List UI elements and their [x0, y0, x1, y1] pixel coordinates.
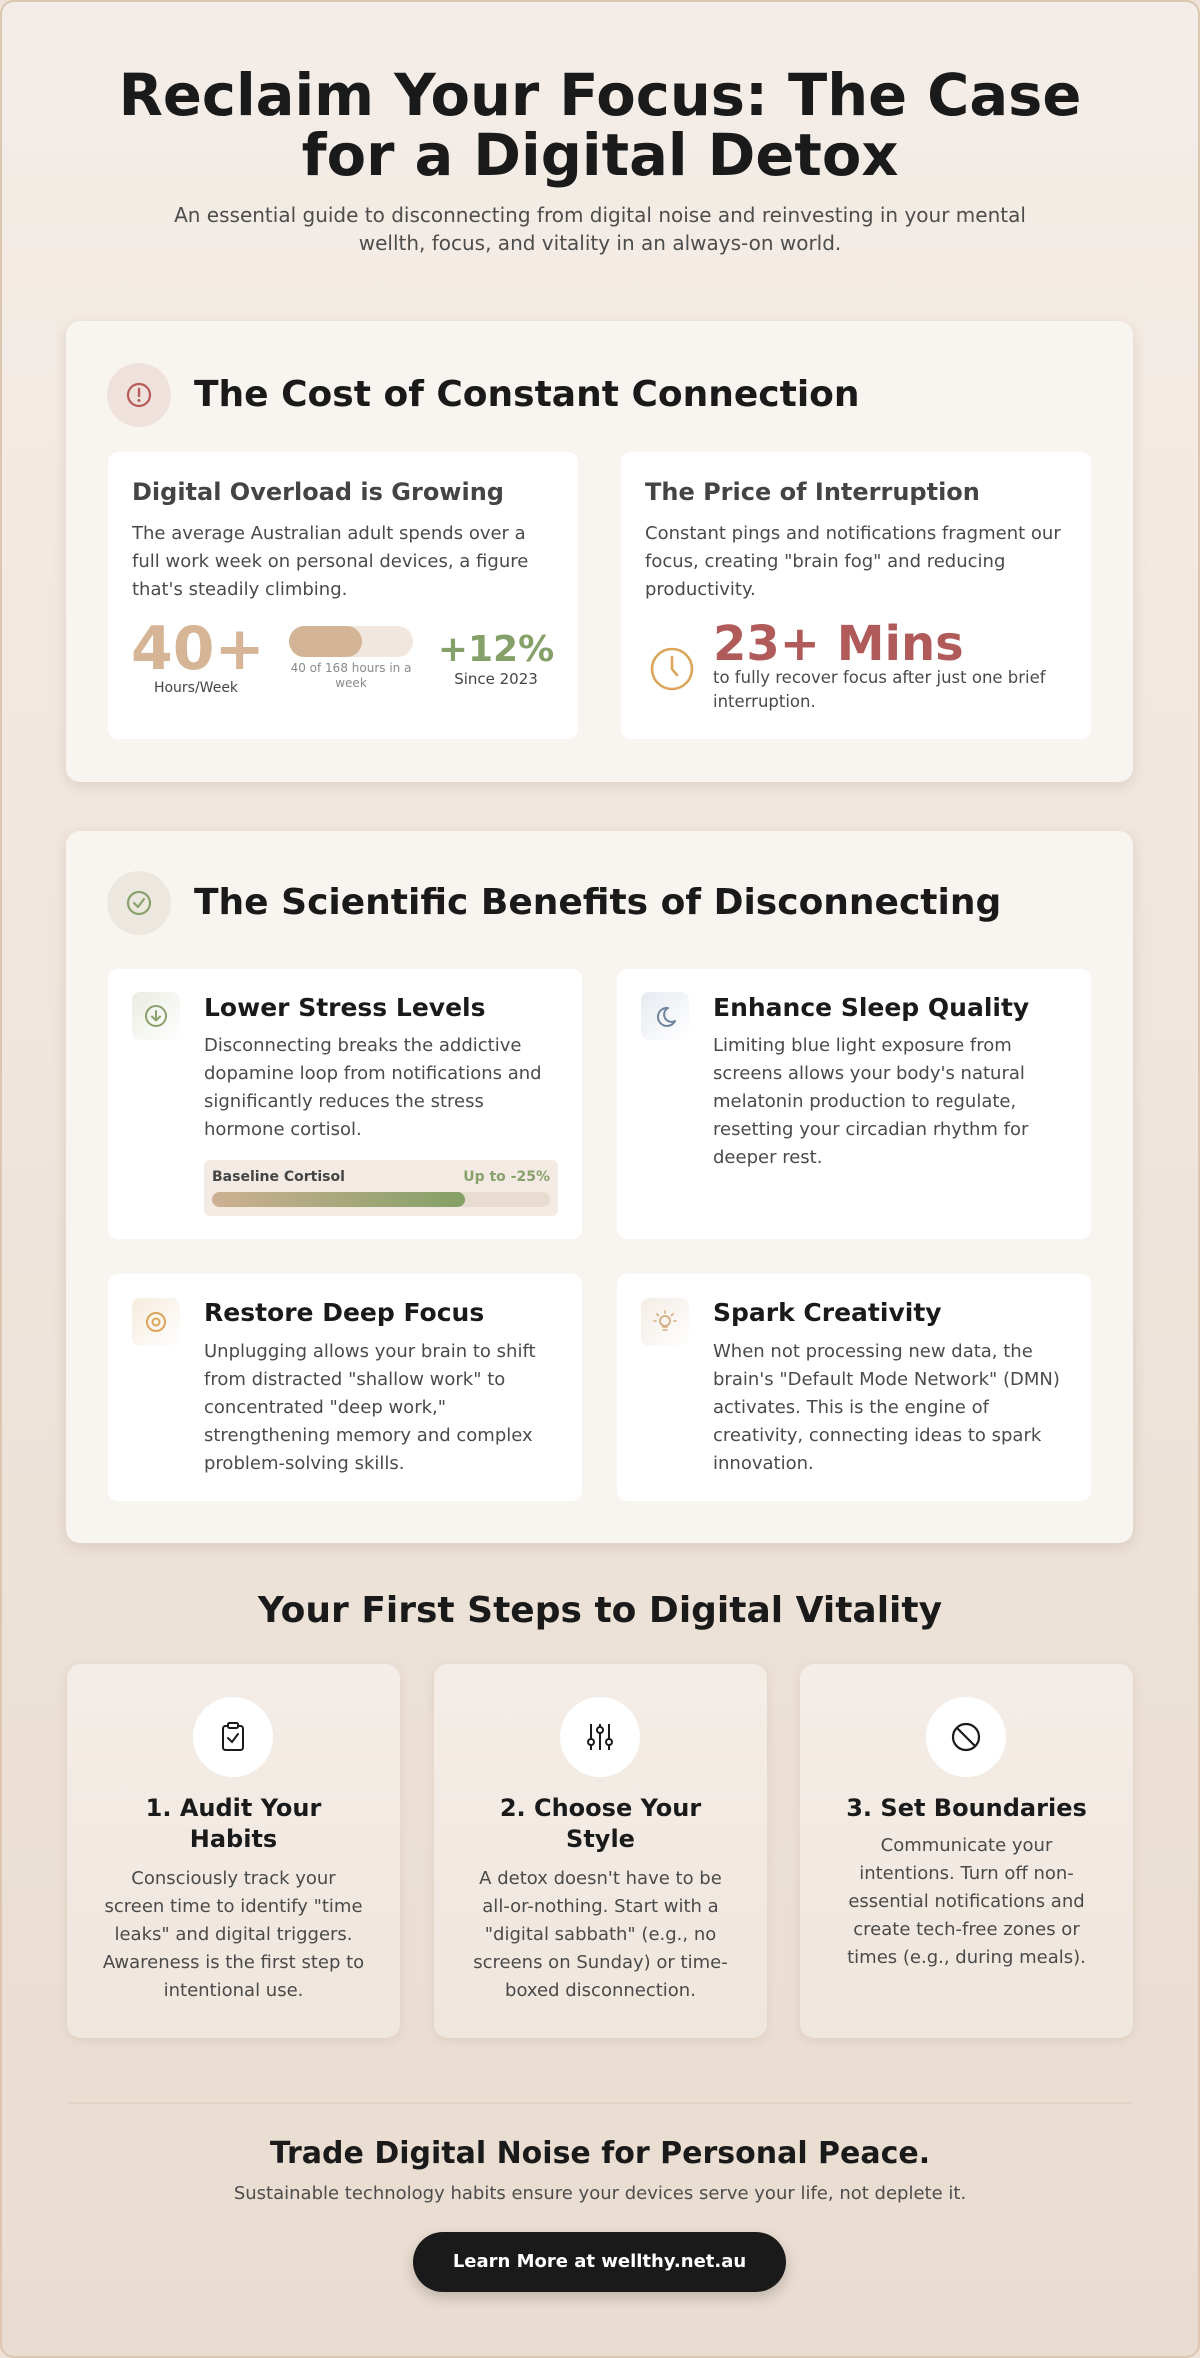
subtitle: An essential guide to disconnecting from digital noise and reinvesting in your mental wellth, focus, and vitality in an always-on world. [174, 203, 1026, 255]
bar: 40 of 168: 40 of 168 hours in a week [291, 661, 411, 690]
cortisol bar [204, 1160, 558, 1216]
panel: cost of constant connection [66, 321, 1133, 782]
heading: first steps: Your First Steps to Digital Vitality [258, 1590, 942, 1631]
cta text: Sustainable technology habits ensure your devices serve your life, not deplete it. [234, 2183, 966, 2204]
text: When not processing new data, the brain's "Default Mode Network" (DMN) activates. This is the engine of creativity, connecting ideas to spark innovation. [713, 1341, 1060, 1474]
stat: 23+ mins: 23+ Mins [713, 616, 964, 672]
step 2 [434, 1664, 767, 2038]
cta heading: Trade Digital Noise for Personal Peace. [270, 2136, 930, 2171]
bar: 40 of 168 [289, 626, 413, 690]
icon: arrow down [132, 992, 180, 1040]
card heading: The Price of Interruption [645, 478, 980, 506]
step 3 [800, 1664, 1133, 2038]
stat caption: to fully recover focus after just one brief interruption. [713, 668, 1046, 711]
title: 2. Choose Your [500, 1794, 701, 1822]
icon: clock [650, 648, 694, 690]
text: A detox doesn't have to be all-or-nothing. Start with a "digital sabbath" (e.g., no screens on Sunday) or time-boxed disconnection. [473, 1868, 728, 2001]
card: lower stress [108, 969, 582, 1239]
card text: The average Australian adult spends over a full work week on personal devices, a figure that's steadily climbing. [132, 523, 528, 600]
text: Disconnecting breaks the addictive dopamine loop from notifications and significantly reduces the stress hormone cortisol. [204, 1035, 542, 1140]
card: deep focus [108, 1274, 582, 1501]
title: 1. Audit Your [146, 1794, 321, 1822]
stat: 40+: Hours/Week [154, 680, 238, 696]
card: price of interruption [621, 452, 1091, 739]
stat: +12%: Since 2023 [454, 670, 538, 688]
title: 3. Set Boundaries [846, 1794, 1087, 1822]
title: Habits [190, 1825, 277, 1853]
button [413, 2232, 786, 2292]
title: Style [566, 1825, 635, 1853]
title [119, 62, 1081, 189]
icon: ban [926, 1697, 1006, 1777]
icon: sliders [560, 1697, 640, 1777]
title: Spark Creativity [713, 1298, 942, 1327]
icon: bulb [641, 1298, 689, 1346]
title: Lower Stress Levels [204, 993, 485, 1022]
title [500, 1794, 702, 1853]
text: Consciously track your screen time to identify "time leaks" and digital triggers. Awareness is the first step to intentional use. [103, 1868, 364, 2001]
title [146, 1794, 322, 1853]
title: Reclaim Your Focus: The Case [119, 62, 1081, 129]
card: sleep [617, 969, 1091, 1239]
cortisol bar: Up to -25% [463, 1169, 550, 1185]
title: for a Digital Detox [302, 122, 898, 189]
card: digital overload [108, 452, 578, 739]
text: Limiting blue light exposure from screens allows your body's natural melatonin production to regulate, resetting your circadian rhythm for deeper rest. [713, 1035, 1028, 1168]
card text: Constant pings and notifications fragment our focus, creating "brain fog" and reducing productivity. [645, 523, 1061, 600]
text: Communicate your intentions. Turn off non-essential notifications and create tech-free zones or times (e.g., during meals). [847, 1835, 1086, 1968]
text: Unplugging allows your brain to shift from distracted "shallow work" to concentrated "deep work," strengthening memory and complex problem-solving skills. [204, 1341, 536, 1474]
stat: 40+: 40+ [131, 614, 265, 684]
cortisol bar: Baseline Cortisol [212, 1169, 345, 1185]
panel: scientific benefits [66, 831, 1133, 1543]
heading: The Cost of Constant Connection [194, 374, 860, 415]
card heading: Digital Overload is Growing [132, 478, 504, 506]
card: creativity [617, 1274, 1091, 1501]
heading: The Scientific Benefits of Disconnecting [194, 882, 1001, 923]
stat: +12%: +12% [438, 629, 554, 670]
title: Enhance Sleep Quality [713, 993, 1029, 1022]
icon: eye [132, 1298, 180, 1346]
icon: clipboard [193, 1697, 273, 1777]
icon: check [107, 871, 171, 935]
icon: moon [641, 992, 689, 1040]
title: Restore Deep Focus [204, 1298, 484, 1327]
button: Learn More at wellthy.net.au [453, 2251, 746, 2272]
stat: +12% [438, 629, 554, 688]
icon: alert [107, 363, 171, 427]
step 1 [67, 1664, 400, 2038]
